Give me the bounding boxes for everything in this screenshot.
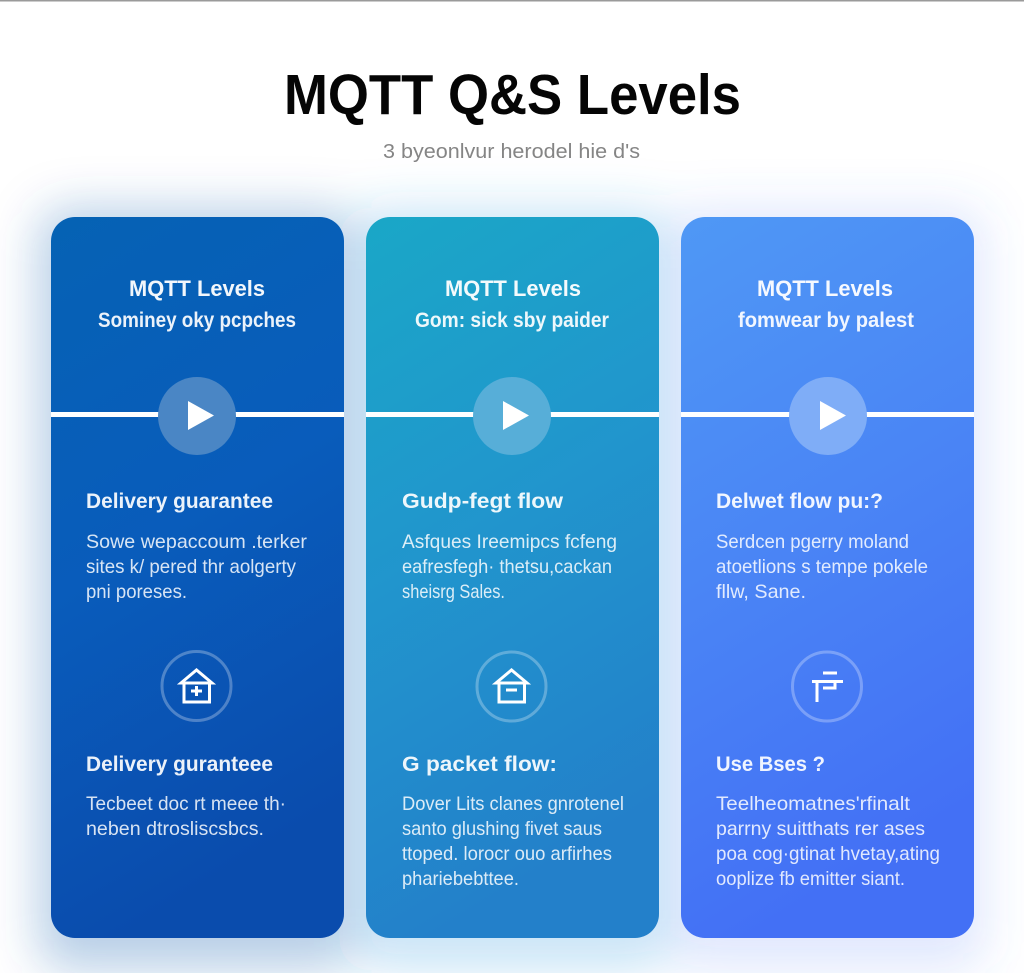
section text: Dover Lits clanes gnrotenel bbox=[402, 793, 624, 815]
column subheading: fomwear by palest bbox=[738, 308, 914, 332]
column heading: MQTT Levels bbox=[757, 276, 893, 301]
column heading: MQTT Levels bbox=[129, 276, 265, 301]
section text: Tecbeet doc rt meee th· bbox=[86, 793, 286, 815]
section text: fllw, Sane. bbox=[716, 581, 806, 603]
section text: Teelheomatnes'rfinalt bbox=[716, 793, 911, 815]
card background bbox=[366, 217, 659, 938]
card background bbox=[51, 217, 344, 938]
card background bbox=[681, 217, 974, 938]
column heading: MQTT Levels bbox=[445, 276, 581, 301]
icon: play button bbox=[789, 377, 867, 455]
section heading: Delivery guranteee bbox=[86, 752, 273, 776]
section text: ttoped. lorocr ouo arfirhes bbox=[402, 843, 612, 865]
section text: eafresfegh· thetsu,cackan bbox=[402, 556, 612, 578]
icon: play button bbox=[473, 377, 551, 455]
section text: Sowe wepaccoum .terker bbox=[86, 531, 308, 553]
section text bbox=[716, 793, 940, 890]
section heading: Gudp-fegt flow bbox=[402, 489, 563, 513]
section heading: Use Bses ? bbox=[716, 752, 825, 776]
section text: atoetlions s tempe pokele bbox=[716, 556, 928, 578]
title: MQTT Q&S Levels bbox=[284, 63, 741, 127]
panel: right column bbox=[681, 217, 974, 938]
icon: flag glyph bbox=[792, 652, 862, 721]
section text: Serdcen pgerry moland bbox=[716, 531, 909, 553]
section text: ooplize fb emitter siant. bbox=[716, 868, 905, 890]
icon: play button bbox=[158, 377, 236, 455]
icon: house with minus bbox=[477, 652, 546, 721]
column subheading: Gom: sick sby paider bbox=[415, 308, 610, 332]
section text bbox=[716, 531, 928, 603]
section text bbox=[402, 793, 624, 890]
section text: poa cog·gtinat hvetay,ating bbox=[716, 843, 940, 865]
section text: sites k/ pered thr aolgerty bbox=[86, 556, 296, 578]
section text: santo glushing fivet saus bbox=[402, 818, 602, 840]
card glow shadows bbox=[38, 208, 986, 970]
column subheading: Sominey oky pcpches bbox=[98, 308, 296, 332]
section heading: G packet flow: bbox=[402, 752, 557, 776]
section text: phariebebttee. bbox=[402, 868, 519, 890]
panel: left column bbox=[51, 217, 344, 938]
section text: neben dtrosliscsbcs. bbox=[86, 818, 264, 840]
section text bbox=[402, 531, 617, 603]
section text bbox=[86, 531, 308, 603]
section heading: Delwet flow pu:? bbox=[716, 489, 883, 513]
section text: parrny suitthats rer ases bbox=[716, 818, 925, 840]
section text: sheisrg Sales. bbox=[402, 581, 505, 603]
section text: pni poreses. bbox=[86, 581, 187, 603]
section heading: Delivery guarantee bbox=[86, 489, 273, 513]
icon: house with plus bbox=[162, 652, 231, 720]
section text: Asfques Ireemipcs fcfeng bbox=[402, 531, 617, 553]
subtitle: 3 byeonlvur herodel hie d's bbox=[383, 141, 640, 163]
section text bbox=[86, 793, 286, 840]
panel: middle column bbox=[366, 217, 659, 938]
